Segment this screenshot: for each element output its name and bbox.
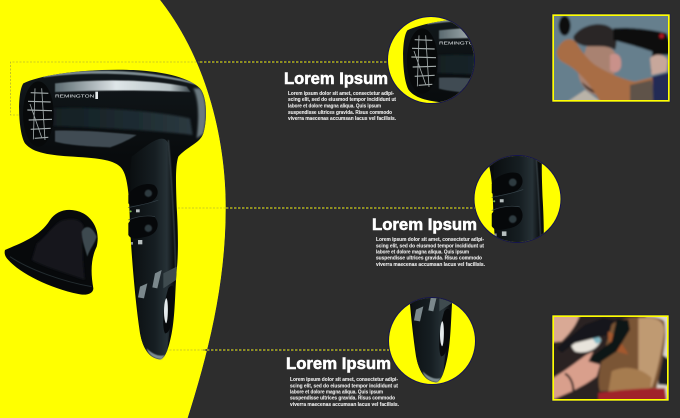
text block 1: Lorem ipsum dolor sit amet, consectetur adipi-: [288, 91, 394, 97]
nozzle attachment: [5, 210, 98, 295]
text block 2: labore et dolore magna aliqua. Quis ipsum: [376, 250, 469, 256]
top dashed frame: [10, 62, 200, 115]
text block 2: [372, 216, 486, 268]
text block 1: labore et dolore magna aliqua. Quis ipsum: [288, 104, 381, 110]
text block 2: suspendisse ultrices gravida. Risus commodo: [376, 256, 482, 262]
text block 2: Lorem Ipsum: [372, 216, 477, 234]
text block 3: suspendisse ultrices gravida. Risus commodo: [290, 396, 395, 402]
callout line 2: [178, 207, 475, 209]
text block 1: suspendisse ultrices gravida. Risus commodo: [288, 110, 392, 116]
text block 1: scing elit, sed do eiusmod tempor incididunt ut: [288, 97, 396, 103]
text block 2: viverra maecenas accumsan lacus vel facilisis.: [376, 262, 486, 268]
text block 3: Lorem Ipsum: [286, 355, 391, 373]
text block 2: scing elit, sed do eiusmod tempor incididunt ut: [376, 243, 484, 249]
hair dryer: [19, 70, 206, 359]
text block 3: viverra maecenas accumsan lacus vel facilisis.: [290, 402, 400, 408]
text block 1: viverra maecenas accumsan lacus vel facilisis.: [288, 116, 397, 122]
callout line 1: [200, 61, 389, 63]
callout line 3: [166, 349, 390, 351]
text block 3: Lorem ipsum dolor sit amet, consectetur adipi-: [290, 377, 398, 383]
text block 1: Lorem Ipsum: [284, 70, 388, 88]
yellow panel: [0, 0, 226, 418]
text block 1: [284, 70, 397, 122]
text block 2: Lorem ipsum dolor sit amet, consectetur adipi-: [376, 237, 484, 243]
text block 3: labore et dolore magna aliqua. Quis ipsum: [290, 390, 383, 396]
text block 3: [286, 355, 400, 408]
text block 3: scing elit, sed do eiusmod tempor incididunt ut: [290, 384, 398, 390]
